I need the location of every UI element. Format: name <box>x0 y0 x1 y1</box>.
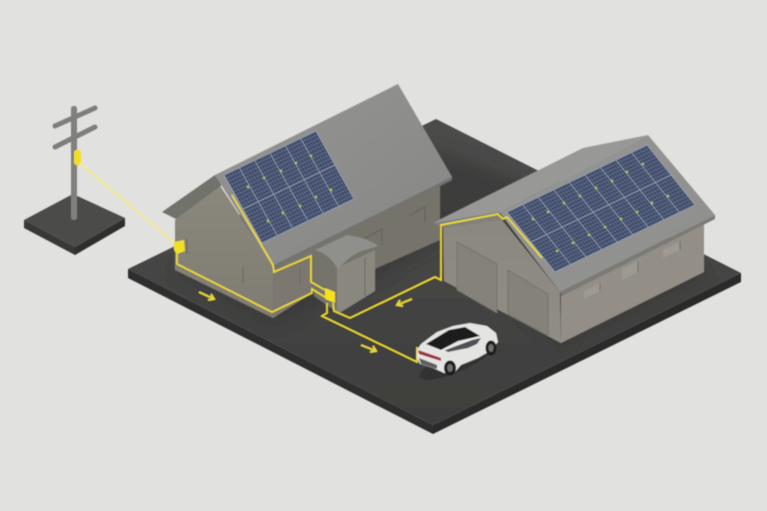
front roof plane <box>500 135 715 292</box>
meter on pole <box>74 150 81 165</box>
wing windows <box>365 207 425 245</box>
porch left wall <box>314 255 337 312</box>
car shadow <box>415 333 501 387</box>
garage doors <box>457 242 548 336</box>
lower bumper <box>419 358 437 369</box>
side wall <box>561 222 704 343</box>
car body <box>417 323 498 373</box>
ground slab <box>128 119 741 434</box>
arrow: toward inverter <box>397 299 412 306</box>
porch door line <box>364 258 366 296</box>
front wheel <box>486 340 496 356</box>
inverter box <box>325 288 335 303</box>
gable wall <box>443 215 561 343</box>
house meter box <box>174 240 185 254</box>
flow arrows <box>199 292 412 352</box>
utility pole with base slab <box>24 106 125 255</box>
rear light band <box>418 350 441 361</box>
side wall windows <box>584 241 680 299</box>
crossarms <box>55 108 95 147</box>
wire: left solar to inverter <box>232 195 325 290</box>
yellow wiring <box>177 195 542 362</box>
wire: inverter to car charger <box>322 303 417 362</box>
building shadows on ground <box>172 150 710 345</box>
right house <box>433 135 715 343</box>
panel optimisers <box>247 155 332 222</box>
arrow: toward car <box>361 345 376 352</box>
left solar panels <box>224 131 354 243</box>
pole base slab <box>24 194 125 255</box>
wire: inverter to right house and solar <box>333 214 542 318</box>
porch <box>314 235 378 312</box>
back wing wall <box>300 185 440 290</box>
back roof plane <box>433 135 648 223</box>
side window <box>444 338 481 352</box>
right solar panels <box>507 145 695 272</box>
porch roof <box>315 235 378 270</box>
left face of gable roof <box>433 212 503 228</box>
pole post <box>71 106 77 220</box>
roof eave edge <box>560 215 715 296</box>
rear wheel <box>444 360 456 376</box>
panel optimisers <box>532 163 669 252</box>
front wall <box>175 178 312 318</box>
window edges <box>600 241 680 291</box>
left house <box>162 84 452 318</box>
roof front edge <box>272 177 452 270</box>
electric car <box>415 323 501 387</box>
black roof glass <box>426 327 480 350</box>
gable roof left plane <box>162 175 222 219</box>
wire: meter to inverter along house <box>177 250 325 312</box>
arrow: along house <box>199 292 214 300</box>
power line from pole to house <box>80 163 177 245</box>
porch right wall <box>337 250 375 312</box>
side wall shade <box>273 250 312 318</box>
roof rail highlight <box>441 337 478 351</box>
window details on front wall <box>187 238 300 283</box>
main roof <box>215 84 452 266</box>
